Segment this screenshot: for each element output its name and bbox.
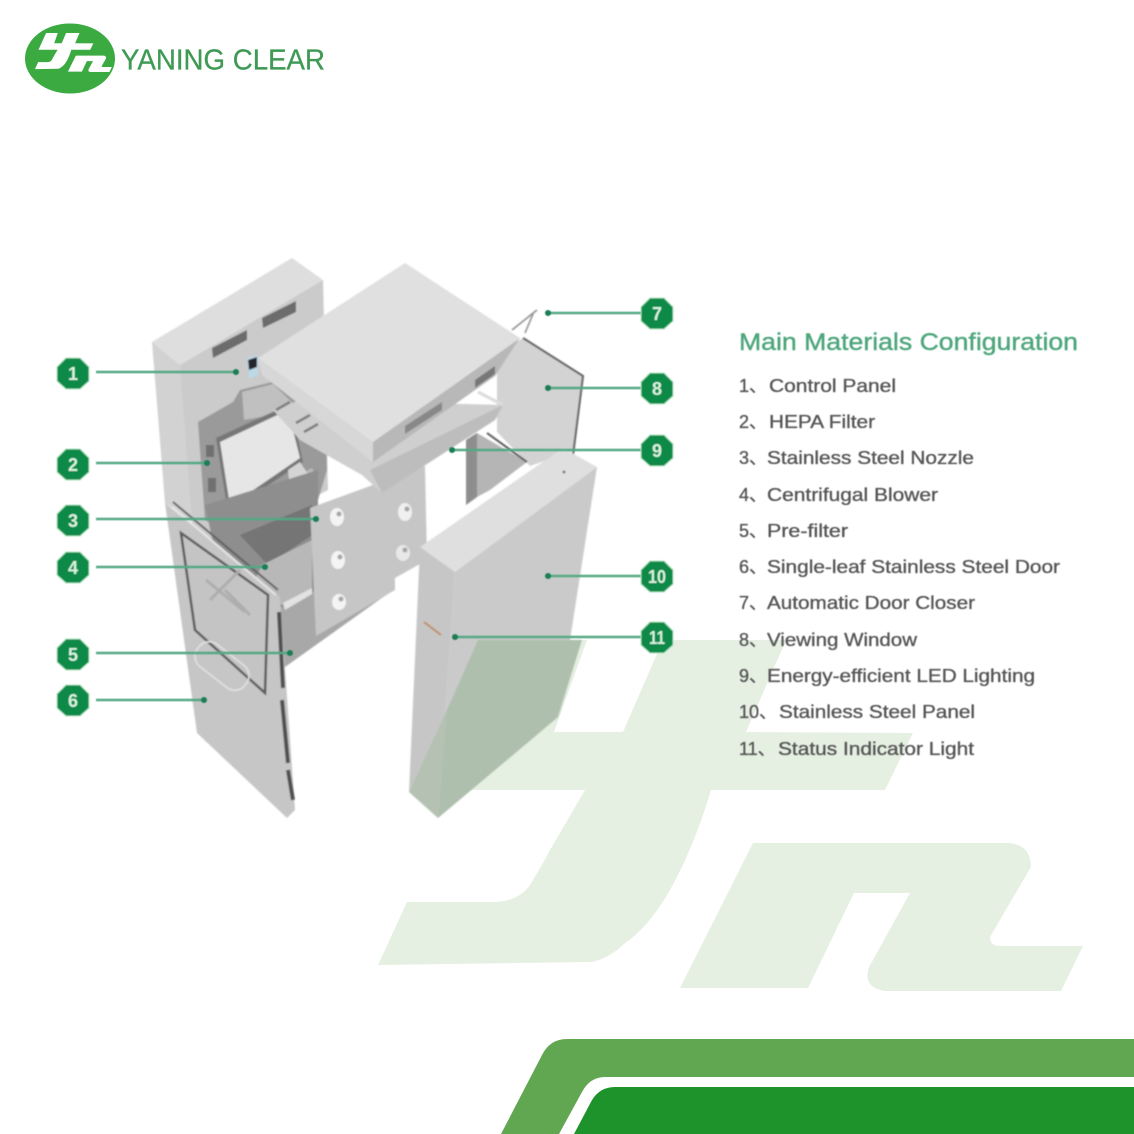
item 6: 6、 [739, 557, 767, 577]
nozzle holes [330, 503, 412, 610]
badge 7: 7 [652, 304, 662, 324]
banner dark green band [574, 1087, 1134, 1134]
item 5: 5、 [739, 521, 767, 541]
item 7: 7、 [739, 593, 767, 613]
item 10: 10、 [739, 702, 777, 722]
callout leader lines [96, 313, 642, 700]
control panel [247, 355, 258, 379]
item 1: 1、 [739, 376, 767, 396]
badge 9: 9 [652, 441, 662, 461]
right front panel [409, 448, 597, 818]
HEPA filter [206, 404, 303, 512]
left door [165, 502, 295, 818]
item 11: Status Indicator Light [778, 739, 974, 759]
badge 2 [57, 449, 89, 480]
background watermark logo [378, 640, 1083, 991]
item 4: 4、 [739, 485, 767, 505]
logo [25, 24, 325, 94]
badge 8: 8 [652, 379, 662, 399]
item 2: HEPA Filter [769, 412, 875, 432]
LED light tray [273, 392, 503, 493]
item 2: 2、 [739, 412, 767, 432]
logo emblem [25, 24, 115, 94]
item 8: Viewing Window [767, 630, 918, 650]
badge 3: 3 [68, 511, 78, 531]
badge 10: 10 [648, 567, 666, 587]
item 5: Pre-filter [767, 521, 848, 541]
badge 4 [57, 552, 89, 583]
badge 7 [641, 298, 673, 329]
item 2 [739, 412, 875, 432]
badge 8 [641, 373, 673, 404]
logo wordmark: YANING CLEAR [121, 44, 325, 76]
badge 6: 6 [68, 691, 78, 711]
inner chamber [205, 470, 393, 672]
item 5 [739, 521, 848, 541]
item 6: Single-leaf Stainless Steel Door [767, 557, 1060, 577]
badge 10 [641, 561, 673, 592]
item 10: Stainless Steel Panel [779, 702, 975, 722]
badge 11: 11 [649, 628, 665, 648]
status indicator light [424, 622, 441, 635]
badge 11 [641, 622, 673, 653]
bottom banner [501, 1039, 1134, 1134]
badge 5 [57, 639, 89, 670]
badge 9 [641, 435, 673, 466]
item 9: 9、 [739, 666, 767, 686]
banner light green band [501, 1039, 1134, 1134]
item 1: Control Panel [769, 376, 896, 396]
nozzle panel [310, 466, 427, 636]
item 8: 8、 [739, 630, 767, 650]
item 7: Automatic Door Closer [767, 593, 975, 613]
heading: Main Materials Configuration [739, 329, 1078, 356]
top slab [258, 263, 520, 462]
door closer [512, 310, 537, 333]
badge 5: 5 [68, 645, 78, 665]
item 3: Stainless Steel Nozzle [767, 448, 974, 468]
badge 6 [57, 685, 89, 716]
badge 1 [57, 358, 89, 389]
callout end dots [201, 310, 551, 703]
number badges [57, 298, 673, 716]
badge 1: 1 [68, 364, 78, 384]
right door with viewing window [466, 338, 583, 505]
item 4: Centrifugal Blower [767, 485, 938, 505]
item 11: 11、 [739, 739, 776, 759]
exploded pass box illustration [152, 258, 597, 818]
materials list [739, 376, 1060, 759]
badge 3 [57, 505, 89, 536]
item 9: Energy-efficient LED Lighting [767, 666, 1035, 686]
item 3: 3、 [739, 448, 767, 468]
item 1 [739, 376, 896, 396]
badge 4: 4 [68, 558, 78, 578]
left tower [152, 258, 328, 560]
badge 2: 2 [68, 455, 78, 475]
